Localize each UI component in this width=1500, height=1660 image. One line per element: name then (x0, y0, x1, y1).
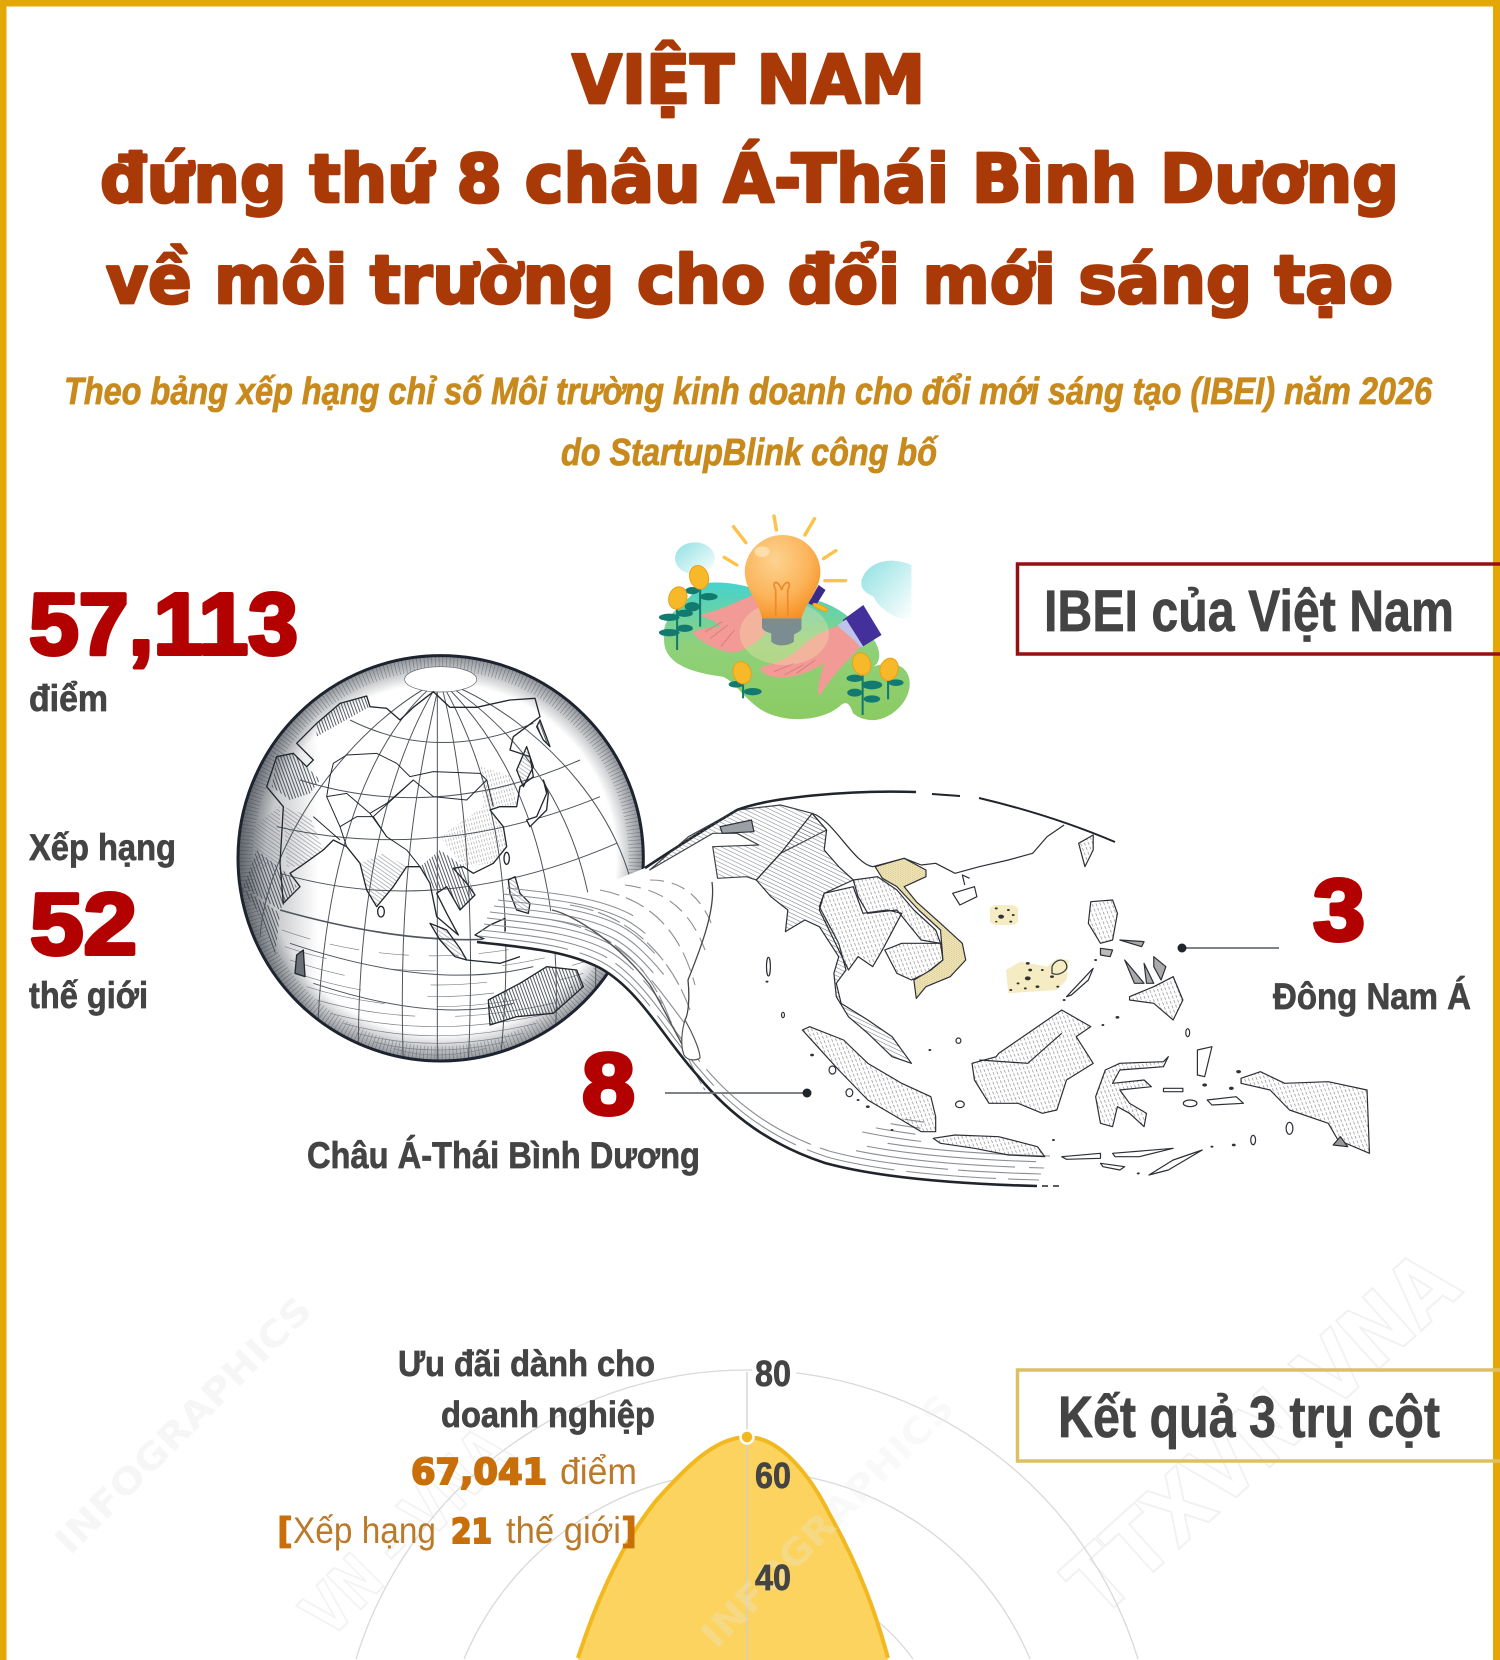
radar chart (356, 1353, 1138, 1660)
pillar label: business incentives: [ (277, 1511, 293, 1552)
Viet Nam highlighted (875, 858, 966, 998)
globe illustration (237, 655, 645, 1063)
subtitle (64, 371, 1433, 474)
Hoang Sa / Truong Sa highlighted (990, 905, 1069, 993)
title: đứng thứ 8 châu Á-Thái Bình Dương (100, 139, 1399, 218)
callout: Asia-Pacific rank (307, 1036, 812, 1176)
pillar label: business incentives: 67,041 (411, 1452, 547, 1493)
icon: lightbulb in hands with money plants (659, 516, 911, 720)
radar grid rings (356, 1370, 1138, 1659)
axis labels (752, 1353, 796, 1598)
callout: Southeast Asia rank: Đông Nam Á (1273, 976, 1471, 1017)
Myanmar & Thai peninsula (756, 813, 911, 1063)
left stat: world rank: Xếp hạng (29, 827, 176, 868)
pillar label: business incentives: doanh nghiệp (441, 1394, 655, 1435)
pillar label: business incentives: Ưu đãi dành cho (398, 1343, 655, 1384)
radar filled area (578, 1437, 888, 1660)
callout: Asia-Pacific rank: 8 (582, 1036, 635, 1133)
callout: Asia-Pacific rank: Châu Á-Thái Bình Dương (307, 1135, 700, 1176)
radar data point (740, 1430, 754, 1444)
pillar label: business incentives: Xếp hạng (293, 1510, 436, 1551)
Taiwan and Hainan (1079, 835, 1093, 867)
Philippines (1067, 900, 1183, 1020)
title: về môi trường cho đổi mới sáng tạo (106, 241, 1393, 319)
title (100, 39, 1399, 319)
watermarks (47, 1231, 1478, 1651)
axis labels: 60 (755, 1455, 791, 1496)
globe outline (238, 656, 643, 1061)
section heading: Kết quả 3 trụ cột (1018, 1370, 1500, 1461)
map of Southeast Asia (650, 805, 1369, 1175)
watermarks: INFOGRAPHICS (47, 1289, 320, 1562)
stat box heading: IBEI của Việt Nam (1018, 564, 1500, 654)
Laos (853, 877, 941, 943)
left stat: world rank: thế giới (29, 975, 148, 1016)
China south coast (812, 813, 1064, 873)
left stat: score: 57,113 (29, 576, 298, 673)
Thailand (819, 887, 902, 970)
pillar label: business incentives: điểm (560, 1451, 637, 1492)
axis labels: 80 (755, 1353, 791, 1394)
subtitle: do StartupBlink công bố (561, 432, 939, 474)
Java (933, 1135, 1045, 1157)
axis labels: 40 (755, 1557, 791, 1598)
Sumatra (802, 1027, 936, 1132)
coastlines (267, 692, 583, 1025)
Eurasian land shading (240, 696, 583, 1025)
watermarks: VN – VNA (287, 1413, 525, 1651)
callout: Southeast Asia rank: 3 (1313, 862, 1365, 959)
peeled ribbon leading to Southeast Asia map (477, 792, 1115, 1186)
left stat: score: điểm (29, 678, 108, 719)
callout: Southeast Asia rank (1178, 862, 1471, 1017)
left stat: world rank (29, 827, 176, 1016)
title: VIỆT NAM (572, 39, 925, 119)
left stat: score (29, 576, 298, 719)
pillar label: business incentives: thế giới (506, 1510, 621, 1551)
Sulawesi (1096, 1057, 1168, 1127)
pillar label: business incentives: ] (621, 1511, 637, 1552)
pillar label: business incentives (277, 1343, 655, 1552)
New Guinea (1241, 1072, 1369, 1153)
pillar label: business incentives: 21 (451, 1512, 492, 1552)
graticule (260, 680, 637, 1063)
Cambodia (885, 943, 943, 980)
left stat: world rank: 52 (30, 876, 137, 973)
drift dots (766, 959, 1241, 1174)
hatch band at globe edge (246, 663, 636, 1053)
pole cap (405, 667, 477, 692)
small islands (767, 957, 1293, 1175)
southern ocean hatching (282, 927, 600, 1055)
Borneo (972, 1010, 1093, 1113)
India / Bangladesh / Bhutan (650, 805, 827, 880)
watermark on radar: INFOGRAPHICS (693, 1387, 963, 1656)
